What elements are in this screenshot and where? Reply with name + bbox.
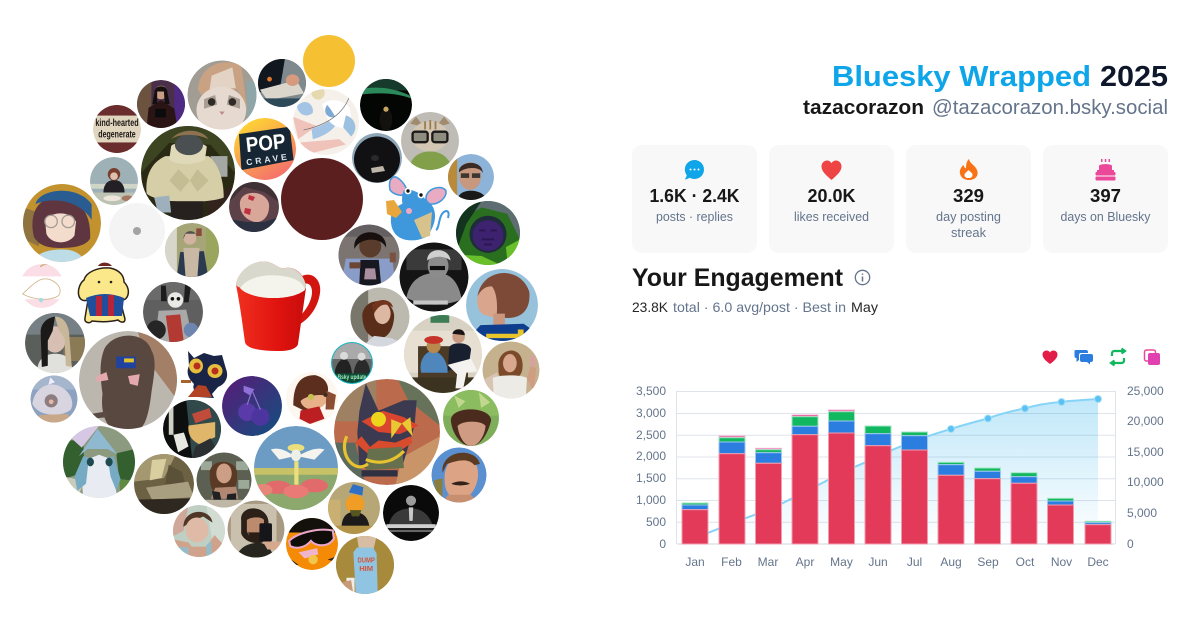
chart: monthly engagement stacked bars with cumulative line — [636, 384, 1164, 569]
month labels: Feb — [721, 555, 742, 569]
engagement summary: May — [851, 299, 878, 315]
panel: day posting streak: day posting — [936, 210, 1001, 224]
avatar: woman with lipstick marks — [229, 182, 279, 232]
month labels: May — [830, 555, 853, 569]
left axis labels: 500 — [646, 515, 666, 529]
avatar: curly hair under green trees — [443, 390, 499, 446]
engagement summary: 23.8K — [632, 299, 669, 315]
avatar: aurora over dark landscape — [360, 79, 412, 131]
month labels: Dec — [1087, 555, 1109, 569]
avatar: woman in fur coat and blue tee: HIM — [359, 564, 373, 573]
month labels: Aug — [940, 555, 962, 569]
avatar: skeleton biker illustration — [143, 282, 203, 342]
panel: posts and replies: posts · replies — [656, 210, 733, 224]
bar Jan — [682, 503, 708, 544]
left axis labels: 2,500 — [636, 428, 666, 442]
icon: legend repost — [1111, 348, 1125, 366]
avatar: Paddington bear with man — [404, 315, 482, 393]
line data points — [948, 396, 1102, 432]
icon: heart — [822, 160, 842, 180]
cumulative line — [695, 399, 1098, 538]
avatar: anime boy at table — [90, 157, 138, 205]
bar Mar — [756, 448, 782, 544]
avatar: Flabebe on flower landscape — [252, 426, 338, 510]
avatar: purple pixel creature — [456, 201, 520, 265]
panel: days on Bluesky: 397 — [1090, 186, 1121, 206]
avatar: Pop Crave logo — [234, 118, 296, 180]
avatar: cat in hat — [188, 60, 256, 134]
right axis labels: 25,000 — [1127, 384, 1164, 398]
avatar bubble cloud — [20, 35, 540, 594]
right axis labels: 15,000 — [1127, 445, 1164, 459]
avatar: rat being held — [79, 331, 177, 429]
engagement summary — [632, 299, 878, 315]
panel: posts and replies: 1.6K · 2.4K — [650, 186, 740, 206]
bar Feb — [719, 436, 745, 544]
panel: posts and replies — [632, 145, 757, 253]
avatar: kind-hearted degenerate badge: kind-hearted — [95, 118, 139, 129]
chart grid — [676, 391, 1116, 544]
icon: blue plush mouse — [386, 177, 449, 240]
avatar: empty grey placeholder — [109, 203, 165, 259]
avatar: Pop Crave logo: CRAVE — [246, 152, 288, 167]
avatar: black-and-white man reading — [400, 242, 468, 312]
avatar: woman with black and blonde hair — [25, 313, 85, 373]
month labels: Nov — [1051, 555, 1072, 569]
avatar: woman in scarf mirror selfie — [165, 223, 219, 277]
avatar: anime girl with beret — [23, 184, 101, 262]
avatar: black dog — [352, 133, 402, 183]
avatar: maroon circle — [281, 158, 363, 240]
bar Aug — [938, 462, 964, 544]
avatar: curly-haired profile in blue jersey — [466, 269, 538, 341]
heading: Your Engagement: Your Engagement — [632, 264, 844, 292]
avatar: Garfield in sunglasses — [286, 518, 338, 570]
title: 2025 — [1100, 61, 1168, 93]
right axis labels — [1127, 384, 1164, 551]
avatar: kind-hearted degenerate badge — [93, 105, 141, 153]
avatar: small black-and-white duo with green text — [331, 342, 373, 384]
bar Dec — [1085, 521, 1111, 544]
icon: chat bubble — [685, 160, 704, 179]
avatar: bird gangster with suit — [163, 400, 221, 458]
avatar: Animal Crossing villager — [286, 372, 338, 424]
avatar: Glaceon pokemon — [63, 426, 135, 498]
title: Bluesky Wrapped — [832, 61, 1091, 93]
avatar: woman in control room — [196, 452, 252, 508]
bar Apr — [792, 415, 818, 544]
bar Oct — [1011, 473, 1037, 544]
avatar: old painted landscape — [134, 454, 194, 514]
panel: days on Bluesky — [1043, 145, 1168, 253]
month labels: Jun — [868, 555, 888, 569]
left axis labels: 3,500 — [636, 384, 666, 398]
avatar: woman with pale top — [173, 505, 225, 557]
month labels: Jan — [685, 555, 705, 569]
avatar: cubone pokemon — [30, 376, 77, 422]
bar Nov — [1048, 498, 1074, 544]
avatar: Litten pokemon with ribbon — [334, 379, 440, 485]
avatar: woman in fur coat and blue tee: DUMP — [357, 556, 375, 565]
left axis labels: 0 — [659, 537, 666, 551]
avatar: cinnamoroll sketch — [22, 264, 62, 308]
avatar: Shaun the Sheep in sweater — [141, 126, 235, 220]
avatar: red-haired woman covering mouth — [350, 288, 410, 346]
avatar: woman in fur coat and blue tee — [336, 536, 394, 594]
month labels: Apr — [796, 555, 814, 569]
bar Jul — [902, 432, 928, 544]
avatar: bearded man mirror selfie — [228, 500, 284, 558]
bar Jun — [865, 426, 891, 544]
avatar: orange puppet — [328, 482, 380, 534]
user handle — [803, 97, 1168, 119]
panel: day posting streak: 329 — [953, 186, 984, 206]
avatar: red mug — [236, 262, 320, 351]
icon: flame — [960, 159, 978, 180]
bar Sep — [974, 468, 1000, 544]
icon: cake — [1096, 159, 1116, 180]
month labels — [685, 555, 1109, 569]
icon: info — [855, 270, 870, 285]
month labels: Jul — [907, 555, 922, 569]
icon: legend quotes — [1144, 350, 1160, 365]
bars: Jan to Dec — [682, 410, 1111, 544]
panel: likes received: likes received — [794, 210, 869, 224]
month labels: Mar — [758, 555, 778, 569]
right axis labels: 5,000 — [1127, 506, 1157, 520]
month labels: Oct — [1016, 555, 1035, 569]
panel: likes received: 20.0K — [808, 186, 856, 206]
avatar: purple cherries — [222, 376, 282, 436]
user handle: tazacorazon — [803, 97, 924, 119]
avatar: man with moustache — [432, 448, 486, 502]
icon: legend replies — [1074, 350, 1093, 364]
right axis labels: 0 — [1127, 537, 1134, 551]
cumulative area — [695, 399, 1098, 544]
panel: day posting streak — [906, 145, 1031, 253]
right axis labels: 10,000 — [1127, 475, 1164, 489]
panel: day posting streak: streak — [951, 226, 987, 240]
chart legend — [1042, 348, 1160, 366]
bar May — [828, 410, 854, 544]
avatar: Pop Crave logo: POP — [245, 130, 287, 157]
month labels: Sep — [977, 555, 999, 569]
avatar: kind-hearted degenerate badge: degenerate — [98, 130, 136, 141]
panel: days on Bluesky: days on Bluesky — [1060, 210, 1151, 224]
user handle: @tazacorazon.bsky.social — [932, 97, 1168, 119]
left axis labels: 2,000 — [636, 449, 666, 463]
avatar: yellow circle — [303, 35, 355, 87]
avatar: sketch of blue and pink figure — [293, 86, 359, 155]
icon: Mae from Night in the Woods — [181, 351, 227, 398]
avatar: person by night bed — [258, 59, 306, 107]
avatar: woman in white top selfie — [482, 342, 540, 398]
avatar: woman in dark room — [137, 80, 185, 128]
left axis labels — [636, 384, 666, 551]
engagement summary: total · 6.0 avg/post · Best in — [673, 299, 846, 315]
left axis labels: 1,500 — [636, 471, 666, 485]
panel: likes received — [769, 145, 894, 253]
right axis labels: 20,000 — [1127, 414, 1164, 428]
left axis labels: 3,000 — [636, 406, 666, 420]
avatar: cat with glasses in green shirt — [401, 112, 459, 170]
avatar: man with glasses — [448, 154, 494, 200]
icon: pompompurin sticker — [78, 263, 128, 323]
icon: legend heart — [1042, 350, 1058, 364]
left axis labels: 1,000 — [636, 493, 666, 507]
avatar: small black-and-white duo with green text: Bsky update — [338, 375, 367, 381]
avatar: woman thumbs-up with t-shirt — [338, 224, 400, 286]
avatar: man at piano black and white — [383, 485, 439, 541]
